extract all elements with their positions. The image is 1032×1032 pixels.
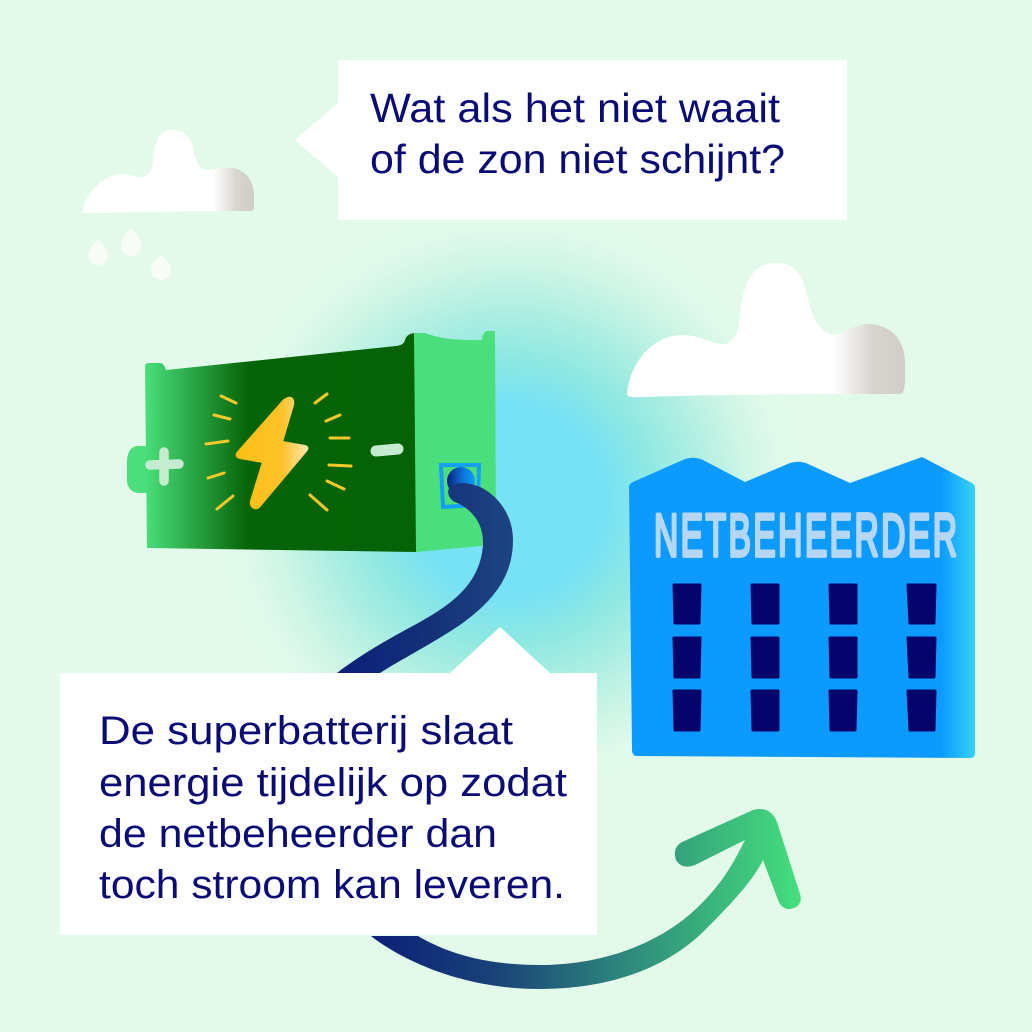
cable plug xyxy=(447,467,475,495)
question text: Wat als het niet waait xyxy=(370,85,781,131)
background glow xyxy=(210,200,810,800)
icon: large cloud xyxy=(627,263,905,397)
cable xyxy=(337,467,513,673)
explanation text: toch stroom kan leveren. xyxy=(99,863,565,907)
arrow to grid operator xyxy=(371,809,801,989)
question text: of de zon niet schijnt? xyxy=(370,136,785,182)
building name: NETBEHEERDER xyxy=(654,503,957,570)
plus sign xyxy=(150,452,179,481)
explanation text: energie tijdelijk op zodat xyxy=(99,761,567,805)
speech bubble: explanation xyxy=(60,627,597,935)
lightning bolt xyxy=(237,398,307,508)
building: netbeheerder xyxy=(629,457,975,758)
explanation text xyxy=(99,709,567,907)
energy rays xyxy=(206,394,351,510)
minus sign xyxy=(376,449,398,451)
battery front xyxy=(145,333,417,552)
icon: rain drops xyxy=(88,228,171,280)
battery xyxy=(127,331,496,552)
building windows xyxy=(674,585,935,730)
explanation text: de netbeheerder dan xyxy=(99,812,497,856)
battery side xyxy=(414,331,496,552)
battery socket xyxy=(441,465,479,507)
speech bubble: question xyxy=(295,60,847,220)
question text xyxy=(370,85,785,182)
icon: rain cloud xyxy=(82,130,254,280)
explanation text: De superbatterij slaat xyxy=(99,709,513,753)
battery terminal xyxy=(127,446,147,493)
